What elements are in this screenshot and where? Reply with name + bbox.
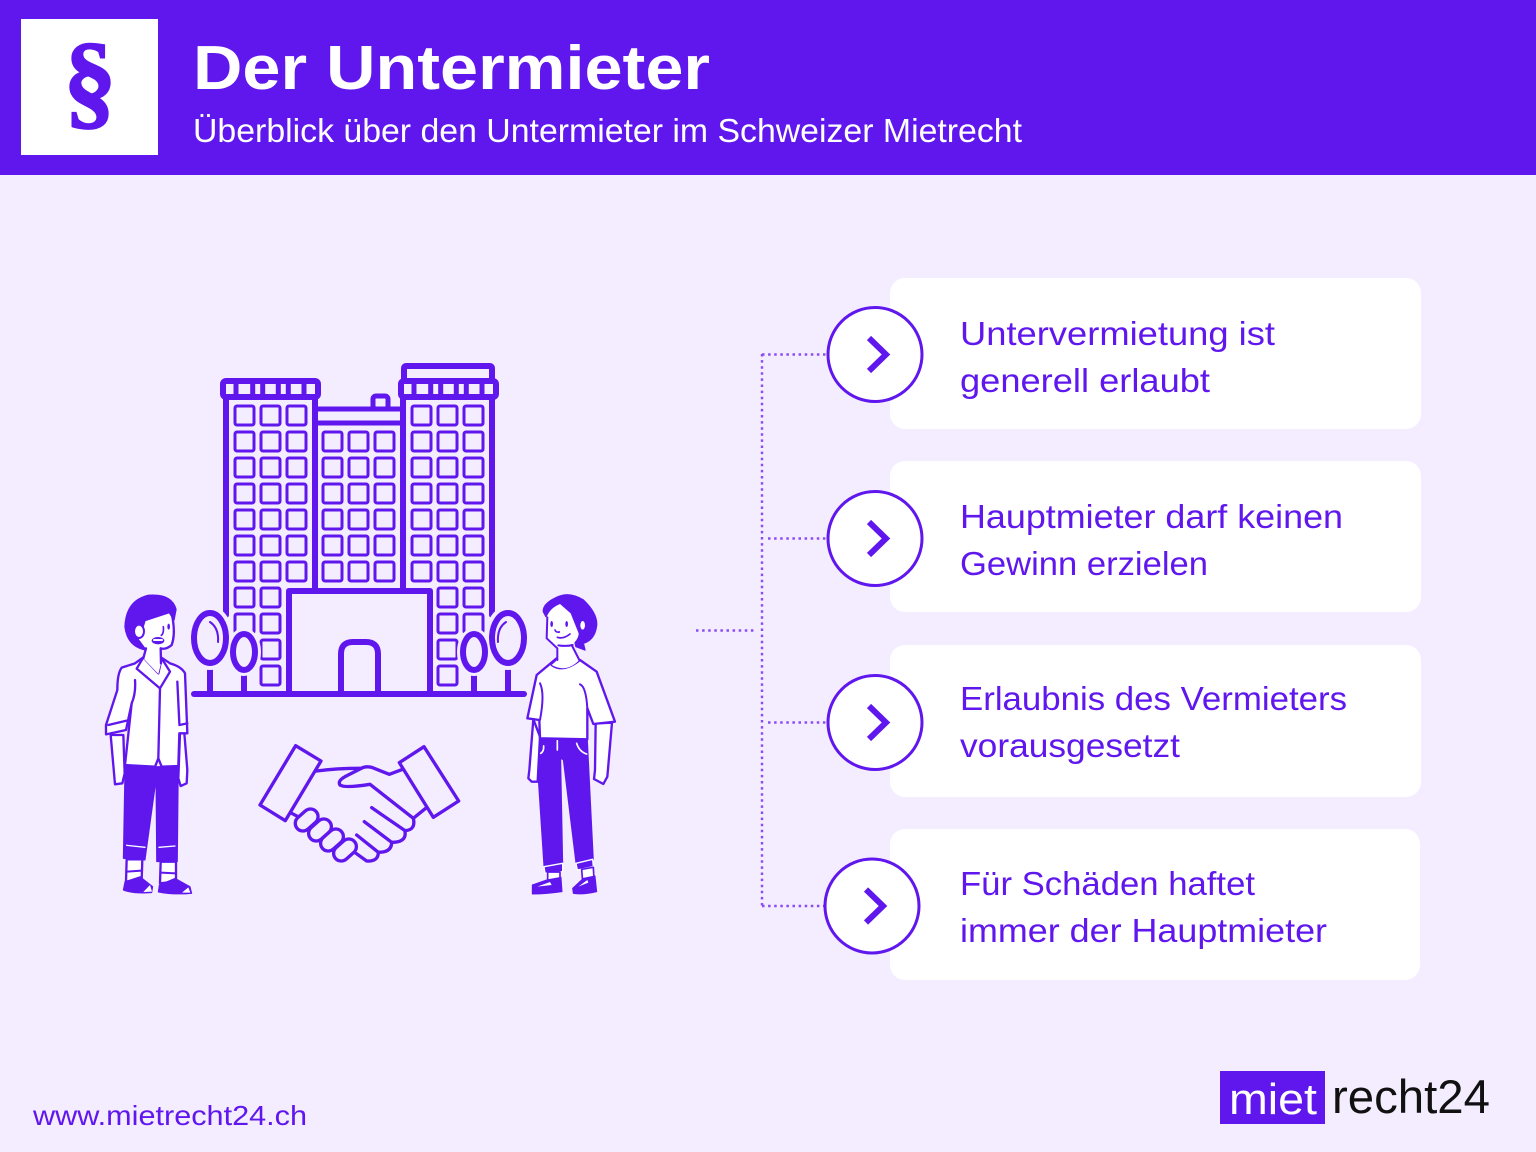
card 1 text: Untervermietung ist bbox=[960, 315, 1275, 352]
footer url: www.mietrecht24.ch bbox=[32, 1100, 307, 1131]
icon: chevron circle 3 bbox=[828, 676, 922, 770]
title: Der Untermieter bbox=[193, 34, 710, 103]
card 2 bbox=[828, 461, 1421, 612]
card 3 text: vorausgesetzt bbox=[960, 727, 1180, 764]
card 4 text: immer der Hauptmieter bbox=[960, 912, 1327, 949]
logo tile: paragraph sign: § bbox=[64, 22, 116, 139]
illustration: woman in white t-shirt bbox=[527, 595, 615, 894]
subtitle: Überblick über den Untermieter im Schweizer Mietrecht bbox=[193, 112, 1022, 149]
icon: chevron circle 2 bbox=[828, 492, 922, 586]
header band bbox=[0, 0, 1536, 175]
illustration: man in white shirt bbox=[106, 595, 192, 894]
brand logo: miet bbox=[1229, 1075, 1317, 1124]
illustration: apartment building with trees bbox=[194, 366, 524, 694]
icon: chevron circle 4 bbox=[825, 859, 919, 953]
logo tile: paragraph sign bbox=[21, 19, 158, 155]
card 2 text: Gewinn erzielen bbox=[960, 545, 1208, 582]
card 4 text: Für Schäden haftet bbox=[960, 865, 1255, 902]
card 3 text: Erlaubnis des Vermieters bbox=[960, 680, 1347, 717]
icon: chevron circle 1 bbox=[828, 308, 922, 402]
card 4 bbox=[825, 829, 1420, 980]
dotted connector lines bbox=[696, 354, 827, 906]
card 1 bbox=[828, 278, 1421, 429]
card 3 bbox=[828, 645, 1421, 797]
card 1 text: generell erlaubt bbox=[960, 362, 1210, 399]
brand logo: recht24 bbox=[1332, 1070, 1490, 1123]
card 2 text: Hauptmieter darf keinen bbox=[960, 498, 1343, 535]
illustration: handshake bbox=[260, 746, 459, 864]
brand logo bbox=[1220, 1070, 1490, 1124]
